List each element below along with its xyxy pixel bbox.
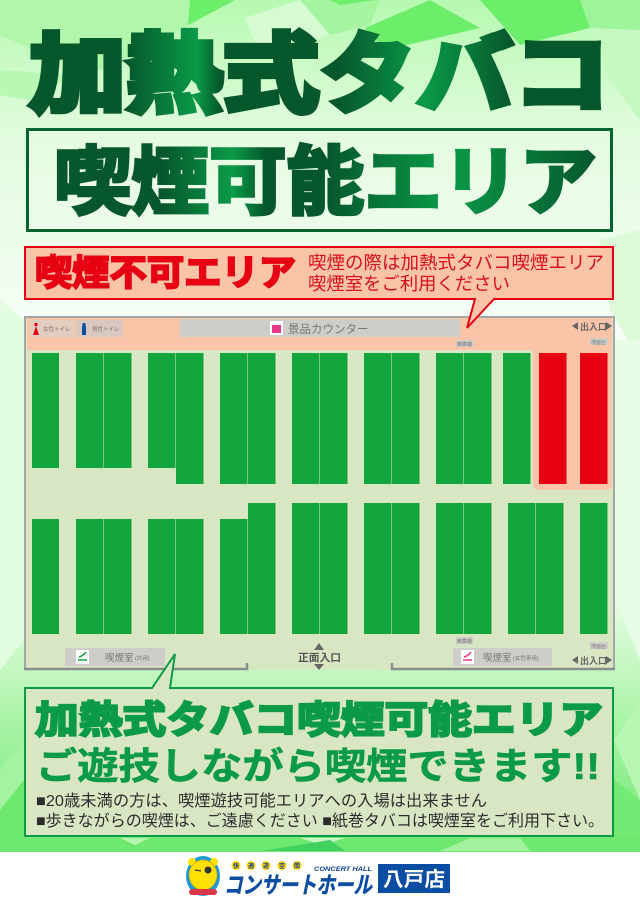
mascot — [186, 856, 220, 896]
callout: smoking allowed: ■歩きながらの喫煙は、ご遠慮ください ■紙巻タバコは喫煙室をご利用下さい。 — [36, 812, 604, 830]
callout: smoking allowed — [25, 654, 613, 836]
small labels bottom: 洗面台 — [591, 643, 606, 650]
exit top — [572, 321, 612, 332]
smoking room shared: 喫煙室 — [105, 652, 134, 664]
title: 加熱式タバコ — [29, 27, 610, 124]
callout: smoking allowed: ■20歳未満の方は、喫煙遊技可能エリアへの入場は出来ません — [36, 792, 487, 810]
logo name: コンサートホール — [224, 872, 373, 898]
callout: smoking allowed: 加熱式タバコ喫煙可能エリア — [35, 700, 603, 742]
small labels top — [456, 338, 608, 348]
callout: no smoking area — [25, 247, 613, 328]
red no-smoking seats — [539, 353, 608, 484]
map walls — [25, 317, 614, 669]
small labels bottom — [456, 637, 608, 650]
callout: smoking allowed: ご遊技しながら喫煙できます!! — [36, 746, 600, 787]
map floor — [25, 317, 614, 670]
branch name — [378, 864, 450, 893]
callout: no smoking area: 喫煙の際は加熱式タバコ喫煙エリア — [308, 253, 604, 273]
exit bottom — [572, 655, 612, 666]
callout: no smoking area: 喫煙室をご利用ください — [308, 274, 510, 294]
logo english: CONCERT HALL — [314, 866, 372, 873]
prize counter — [180, 319, 460, 337]
restroom labels: 男性トイレ — [92, 325, 120, 333]
logo balls: 遊 — [263, 862, 269, 870]
smoking room women: 喫煙室 — [483, 652, 512, 664]
subtitle box: 喫煙可能エリア — [54, 140, 597, 224]
smoking room women — [453, 648, 552, 666]
logo balls — [232, 861, 302, 870]
top row seats — [32, 353, 530, 484]
small labels top: 洗面台 — [591, 339, 606, 346]
restroom labels: 女性トイレ — [43, 325, 71, 333]
bottom row seats — [32, 503, 608, 634]
callout: no smoking area: 喫煙不可エリア — [35, 252, 296, 293]
floor map — [24, 317, 615, 670]
exit bottom: 出入口 — [580, 655, 607, 666]
branch name: 八戸店 — [383, 868, 445, 891]
logo: Concert Hall — [186, 856, 450, 898]
logo balls: 適 — [248, 862, 254, 870]
exit top: 出入口 — [580, 321, 607, 332]
smoking room shared — [65, 648, 165, 666]
non-smoking floor area — [27, 318, 612, 490]
logo balls: 間 — [294, 863, 300, 870]
logo balls: 快 — [233, 862, 239, 870]
front entrance: 正面入口 — [298, 652, 341, 664]
front entrance — [298, 643, 341, 670]
small labels top: 精算機 — [457, 341, 472, 348]
footer white band — [0, 852, 640, 904]
restroom labels — [30, 320, 123, 337]
prize counter: 景品カウンター — [288, 323, 368, 336]
small labels bottom: 精算機 — [457, 638, 472, 645]
logo balls: 空 — [279, 862, 285, 870]
smoking room shared: (共用) — [135, 654, 150, 662]
smoking room women: (女性専用) — [513, 654, 539, 662]
